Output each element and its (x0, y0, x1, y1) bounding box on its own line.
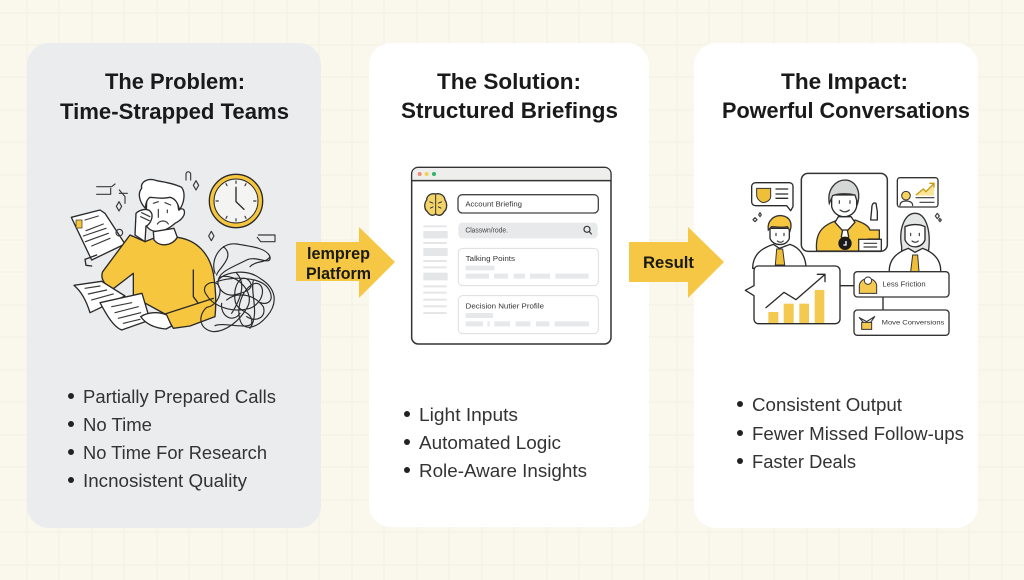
arrow: result (629, 227, 724, 298)
arrow: lemprep platform: lemprep (307, 245, 370, 263)
box: more conversions: Move Conversions (882, 320, 945, 327)
bullet list: outcomes: Consistent Output (752, 394, 902, 415)
card: talking points: Talking Points (466, 254, 515, 263)
bullet list: problems: No Time (83, 414, 152, 435)
heading: the problem: The Problem: (105, 69, 245, 94)
icon: document held up (71, 210, 125, 266)
bullet list: problems: Incnosistent Quality (83, 470, 248, 491)
heading: the problem: Time-Strapped Teams (60, 99, 289, 124)
heading: the impact (722, 69, 970, 123)
video call frame with presenter (801, 173, 887, 251)
heading: the solution (401, 69, 618, 123)
illustration: stressed person with clock and tangled lines (71, 172, 275, 332)
arrow: lemprep platform: Platform (306, 265, 371, 283)
award card with trend (897, 178, 941, 222)
tangled scribble (201, 244, 274, 332)
browser frame (412, 167, 611, 344)
box: less friction (854, 272, 949, 297)
search bar: Classwn/rode. (465, 228, 508, 235)
field: account briefing (458, 195, 598, 213)
speech bubble: shield and lines (752, 183, 793, 222)
hand on forehead (135, 209, 152, 242)
card: decision maker profile (458, 296, 598, 334)
chart speech bubble (745, 266, 840, 324)
panel: the solution (369, 43, 649, 527)
card: talking points (458, 248, 598, 286)
head and hair (146, 193, 184, 231)
papers on desk (74, 281, 125, 313)
bullet list: solution features: Role-Aware Insights (419, 460, 587, 481)
bullet list: solution features: Light Inputs (419, 404, 518, 425)
illustration: team conversation with chart (745, 173, 949, 335)
panel: the impact (694, 43, 978, 528)
heading: the solution: The Solution: (437, 69, 581, 94)
bullet list: problems (68, 386, 276, 491)
bullet list: outcomes: Faster Deals (752, 451, 856, 472)
bullet list: problems: Partially Prepared Calls (83, 386, 276, 407)
small sparkles (97, 172, 275, 242)
bullet list: solution features: Automated Logic (419, 432, 561, 453)
sidebar placeholders (423, 225, 448, 314)
arrow: lemprep platform (296, 227, 395, 298)
heading: the problem (60, 69, 289, 124)
search bar (458, 223, 598, 238)
heading: the solution: Structured Briefings (401, 98, 618, 123)
person: left with yellow hair (753, 216, 806, 268)
heading: the impact: Powerful Conversations (722, 98, 970, 123)
person: right woman (889, 213, 941, 273)
illustration: browser window with briefing (412, 167, 611, 344)
bullet list: outcomes: Fewer Missed Follow-ups (752, 423, 964, 444)
connectors (840, 286, 883, 310)
bullet list: outcomes (737, 394, 964, 472)
box: more conversions (854, 310, 949, 335)
icon: clock (209, 174, 263, 228)
card: decision maker profile: Decision Nutier Profile (466, 301, 544, 310)
box: less friction: Less Friction (882, 281, 926, 288)
heading: the impact: The Impact: (781, 69, 908, 94)
sweater (102, 235, 216, 328)
icon: brain (425, 194, 447, 215)
bullet list: problems: No Time For Research (83, 442, 267, 463)
arrow: result: Result (643, 254, 694, 272)
field: account briefing: Account Briefing (465, 199, 522, 208)
bullet list: solution features (404, 404, 587, 481)
panel: the problem (27, 43, 321, 528)
